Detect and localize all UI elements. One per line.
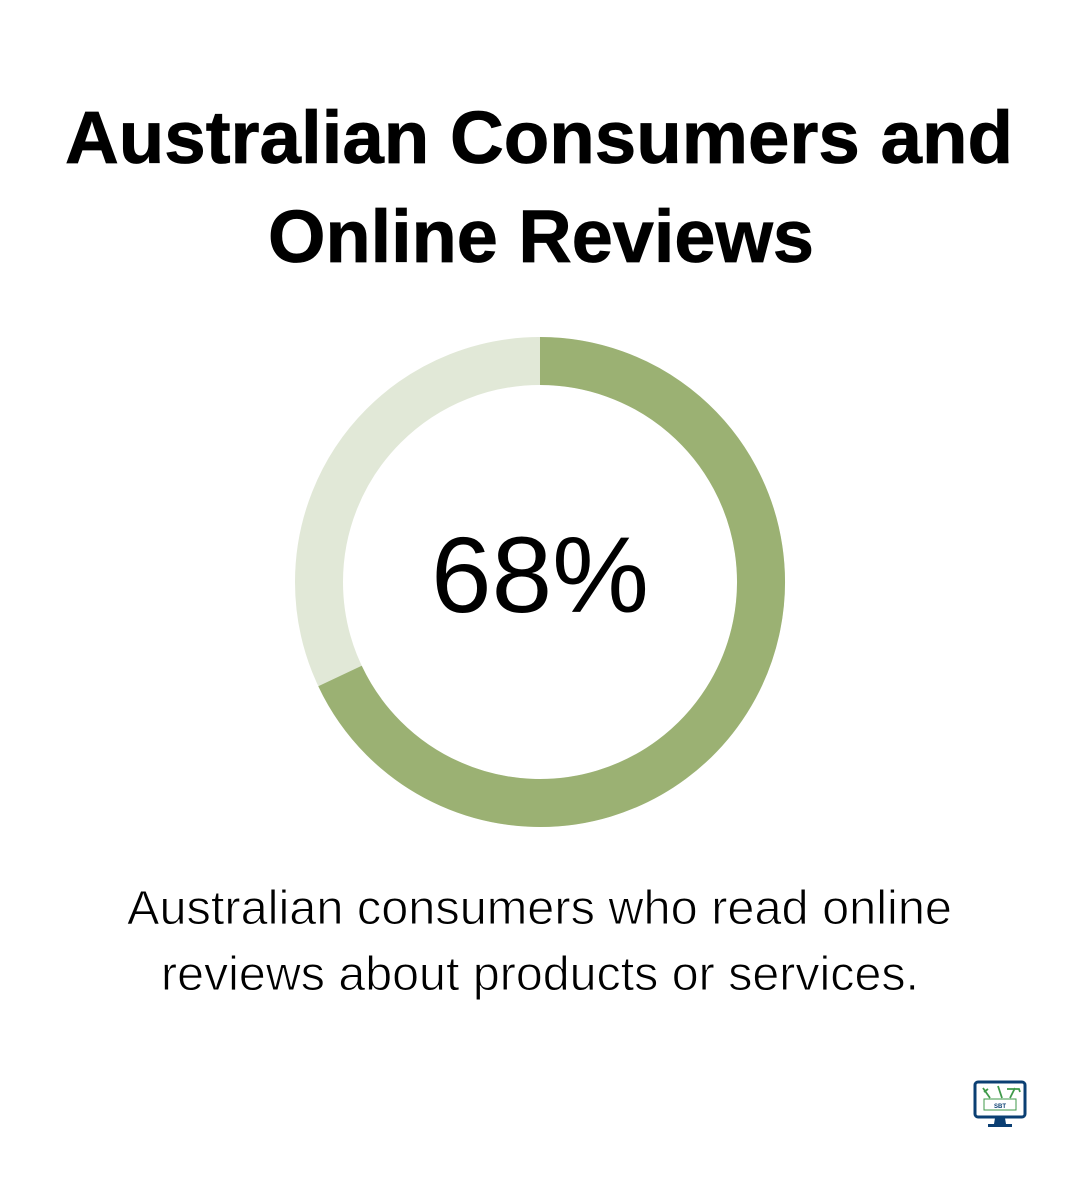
title: Australian Consumers and xyxy=(65,96,1013,179)
value: 68%: 68% xyxy=(431,514,649,635)
icon: monitor logo with toolbox: SBT xyxy=(994,1104,1006,1110)
donut chart: 68% xyxy=(319,361,761,803)
description text: reviews about products or services. xyxy=(161,948,919,1001)
title: Online Reviews xyxy=(268,195,814,278)
title xyxy=(65,96,1013,278)
description text: Australian consumers who read online xyxy=(127,882,952,935)
description text xyxy=(127,882,952,1001)
icon: monitor logo with toolbox xyxy=(975,1082,1025,1127)
